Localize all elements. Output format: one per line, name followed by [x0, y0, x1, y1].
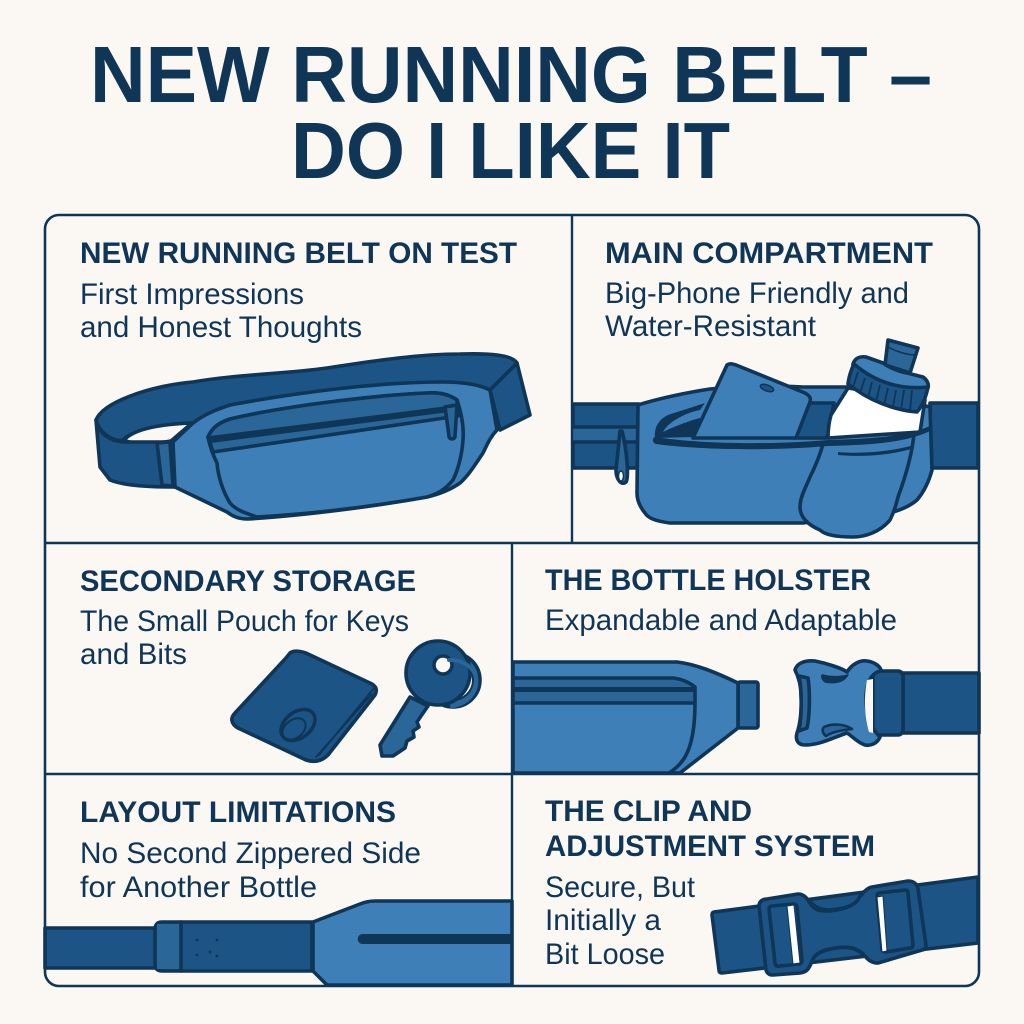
- text: first impressions: and Honest Thoughts: [80, 311, 362, 344]
- text: small pouch: [80, 605, 409, 671]
- heading: secondary storage: SECONDARY STORAGE: [80, 565, 416, 598]
- text: secure but loose: [545, 871, 696, 971]
- title: NEW RUNNING BELT –: [90, 30, 932, 119]
- panel frame: [45, 215, 979, 986]
- panel: main compartment: [573, 237, 978, 537]
- heading: layout limitations: LAYOUT LIMITATIONS: [80, 796, 396, 829]
- heading: main compartment: MAIN COMPARTMENT: [605, 237, 933, 270]
- text: small pouch: and Bits: [80, 638, 187, 671]
- panel: new running belt on test: [80, 237, 530, 519]
- heading: the clip and adjustment system: ADJUSTMENT SYSTEM: [545, 830, 875, 863]
- icon: belt with phone and bottle: [573, 340, 978, 537]
- text: no second zippered side: [80, 837, 421, 904]
- text: secure but loose: Initially a: [545, 904, 661, 937]
- icon: buckle and strap: [712, 877, 978, 975]
- icon: key: [380, 641, 480, 756]
- panel: the clip and adjustment system: [545, 795, 978, 975]
- icon: running belt: [96, 354, 530, 519]
- text: secure but loose: Secure, But: [545, 871, 696, 904]
- panel: layout limitations: [45, 796, 512, 985]
- icon: flat belt: [45, 901, 512, 985]
- title: [90, 30, 932, 195]
- title: DO I LIKE IT: [291, 106, 730, 195]
- text: first impressions: First Impressions: [80, 278, 304, 311]
- panel: the bottle holster: [513, 564, 979, 773]
- text: expandable: Expandable and Adaptable: [545, 604, 897, 637]
- icon: belt pouch: [513, 662, 758, 773]
- text: no second zippered side: No Second Zippered Side: [80, 837, 421, 870]
- heading: the bottle holster: THE BOTTLE HOLSTER: [545, 564, 871, 597]
- text: big-phone friendly: [605, 277, 909, 343]
- icon: buckle: [795, 661, 979, 745]
- panel: secondary storage: [80, 565, 480, 761]
- icon: pouch: [232, 651, 376, 761]
- text: big-phone friendly: Big-Phone Friendly and: [605, 277, 909, 310]
- text: small pouch: The Small Pouch for Keys: [80, 605, 409, 638]
- text: no second zippered side: for Another Bottle: [80, 871, 317, 904]
- text: big-phone friendly: Water-Resistant: [605, 310, 817, 343]
- heading: the clip and adjustment system: THE CLIP AND: [545, 795, 752, 828]
- text: first impressions: [80, 278, 362, 344]
- text: secure but loose: Bit Loose: [545, 938, 665, 971]
- heading: the clip and adjustment system: [545, 795, 875, 863]
- heading: new running belt on test: NEW RUNNING BELT ON TEST: [80, 237, 517, 270]
